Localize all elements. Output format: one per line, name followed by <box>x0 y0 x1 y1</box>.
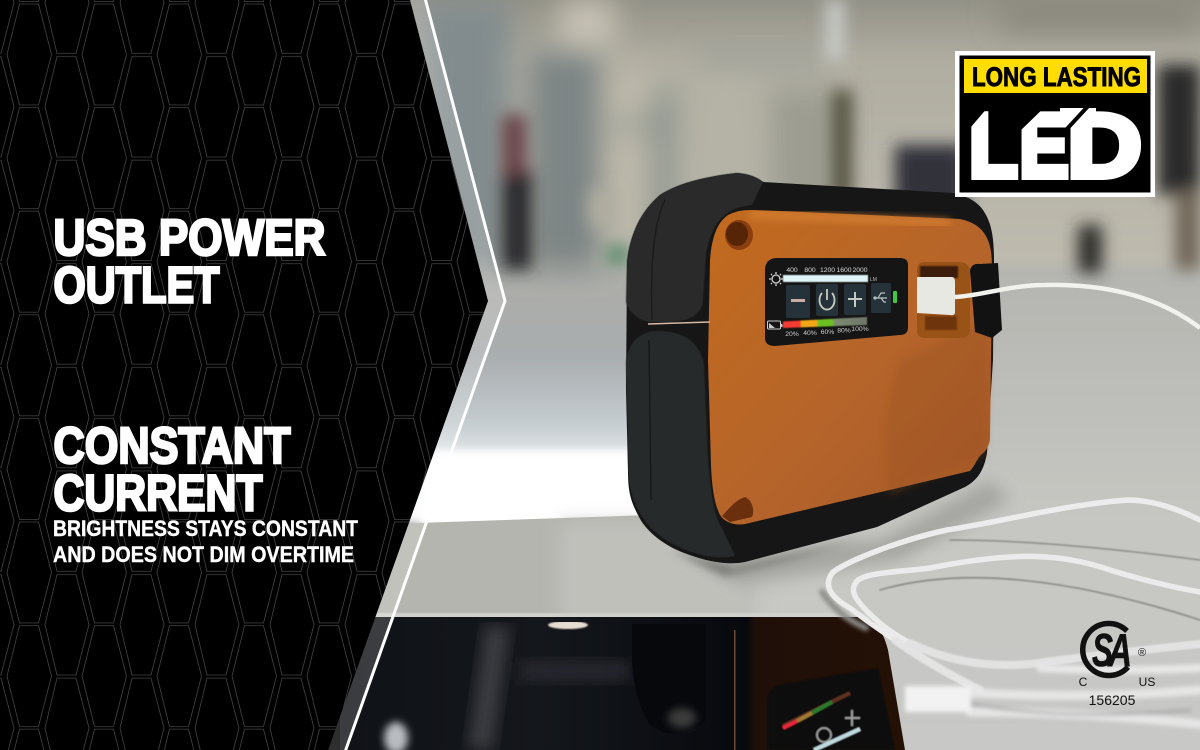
background: warehouse details <box>420 0 1200 273</box>
badge: LED wordmark: D <box>1067 96 1142 197</box>
CSA: SA letters: A <box>1107 624 1132 676</box>
CSA certification mark: C <box>1079 675 1088 689</box>
panel: battery labels: 40% <box>803 330 817 337</box>
heading: Constant Current: CONSTANT <box>54 417 290 474</box>
product: USB cable <box>955 285 1200 328</box>
shadow under device <box>676 544 837 580</box>
badge: LED wordmark: L <box>969 96 1018 197</box>
product: screw recess bottom <box>722 497 753 522</box>
text: brightness description: AND DOES NOT DIM OVERTIME <box>53 542 354 567</box>
background: blurred warehouse and floor base <box>408 0 1200 750</box>
badge: Long Lasting LED <box>955 51 1155 197</box>
panel: battery labels: 80% <box>837 328 851 334</box>
panel: battery labels: 60% <box>821 329 834 336</box>
badge: LED wordmark: E <box>1019 96 1069 197</box>
panel: lumen labels: 1600 <box>836 267 852 274</box>
panel: usb button <box>871 283 891 313</box>
product: black rubber frame <box>626 173 994 563</box>
panel: lumen labels: 1200 <box>820 267 835 274</box>
panel: brightness bar <box>783 275 868 282</box>
CSA: SA letters: S <box>1092 624 1113 676</box>
panel: power button <box>816 284 838 316</box>
panel: battery icon <box>768 321 782 329</box>
CSA certification mark: ® <box>1138 647 1146 659</box>
panel: sun icon <box>769 272 783 286</box>
panel: lumen labels <box>786 267 868 274</box>
product: control panel: LM <box>870 277 877 283</box>
phone: reflected control panel <box>768 668 895 750</box>
charging cables <box>822 500 1200 724</box>
CSA certification mark: 156205 <box>1089 692 1136 708</box>
badge: LED wordmark <box>969 96 1142 197</box>
heading: Constant Current: CURRENT <box>54 464 262 522</box>
badge: E-D joining bar <box>1060 108 1096 127</box>
badge: long lasting label: LONG LASTING <box>972 62 1141 92</box>
panel: lumen labels: 400 <box>786 267 798 274</box>
product: lower-left bumper <box>626 331 735 557</box>
heading: USB Power Outlet <box>54 209 326 314</box>
photo background <box>280 0 1200 750</box>
heading: USB Power Outlet: OUTLET <box>54 256 220 314</box>
panel: lumen labels: 800 <box>804 267 816 274</box>
badge: E-D diagonal slash <box>1066 104 1090 130</box>
product: upper-left bumper <box>626 173 763 322</box>
background: lit floor and table <box>376 447 1008 614</box>
panel: battery labels: 20% <box>785 331 799 338</box>
text: brightness description <box>53 516 358 567</box>
panel: plus button <box>844 284 866 315</box>
badge: L chamfer <box>965 100 994 134</box>
left black panel with hexagon pattern <box>0 0 505 750</box>
panel: battery labels <box>785 326 869 338</box>
product: orange face plate <box>708 210 992 525</box>
heading: USB Power Outlet: USB POWER <box>54 209 326 266</box>
product: control panel <box>765 258 908 346</box>
heading: Constant Current <box>54 417 290 522</box>
phone reflective surface <box>340 613 905 750</box>
CSA certification mark <box>1079 624 1155 708</box>
glass band between panel and white chevron <box>328 0 505 750</box>
CSA: circle C <box>1083 624 1128 676</box>
product: port recess <box>917 262 970 338</box>
panel: green LED <box>893 291 897 303</box>
product: work light <box>626 173 1200 563</box>
badge: E chamfer <box>1019 100 1052 132</box>
product: USB plug <box>917 277 955 315</box>
product: black clip <box>970 263 1002 338</box>
white chevron line <box>345 0 505 750</box>
CSA certification mark: US <box>1139 675 1155 689</box>
text: brightness description: BRIGHTNESS STAYS CONSTANT <box>53 516 358 541</box>
panel: minus button <box>786 285 810 318</box>
product: screw recess top <box>725 220 753 250</box>
product: seam highlight <box>648 322 710 324</box>
panel: battery labels: 100% <box>851 326 869 333</box>
panel: lumen labels: 2000 <box>852 267 868 274</box>
panel: battery bar <box>783 317 867 328</box>
